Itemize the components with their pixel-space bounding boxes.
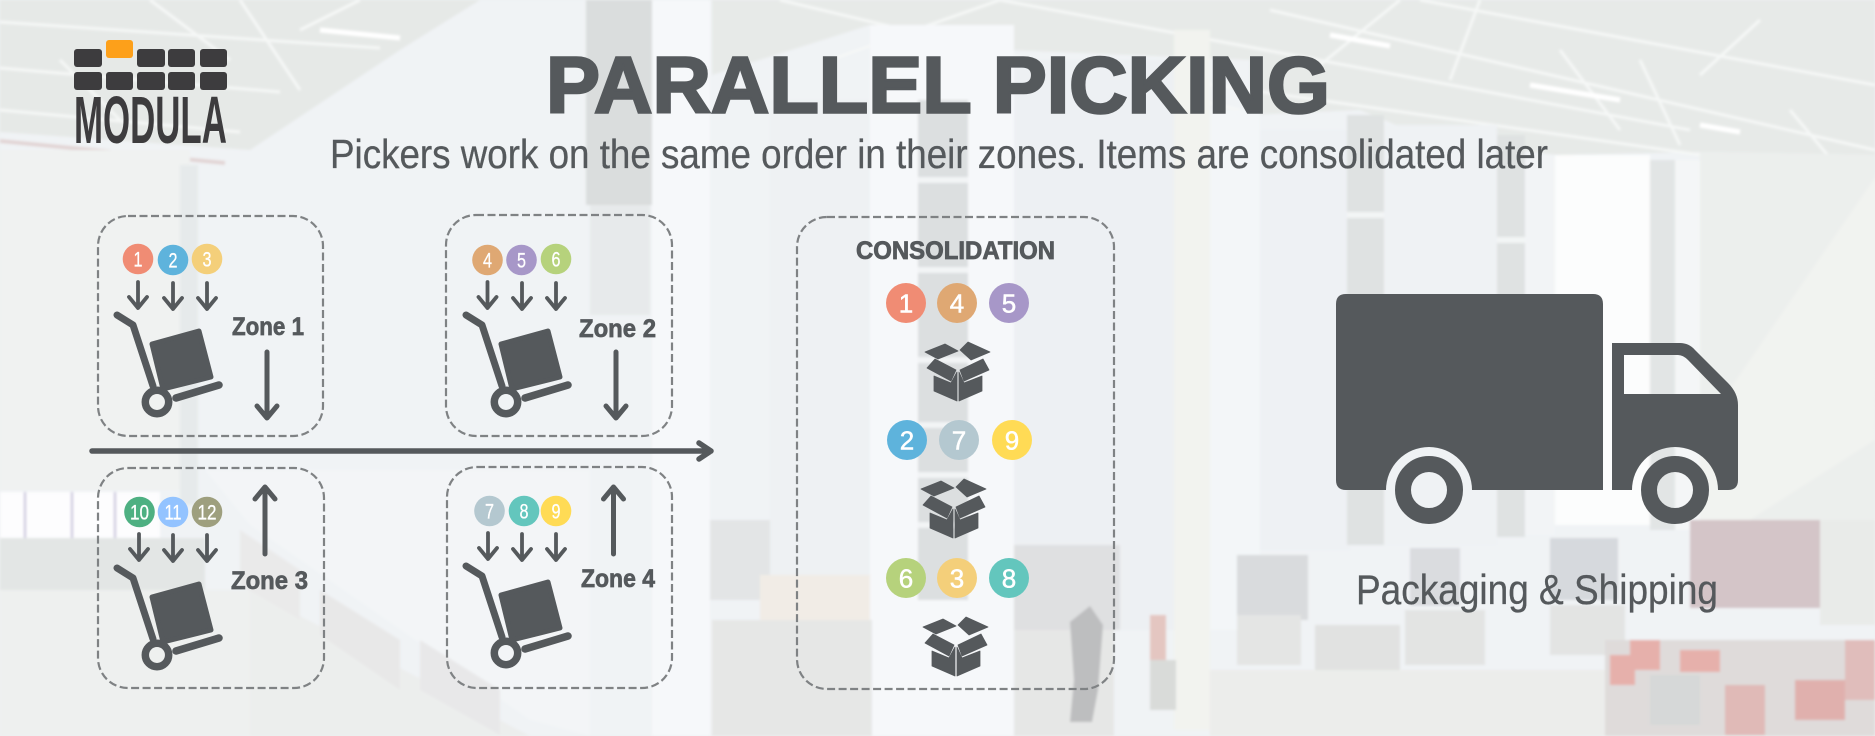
consolidation heading: CONSOLIDATION <box>856 237 1055 265</box>
arrow: flow to consolidation <box>92 443 711 459</box>
zone label: Zone 4 <box>581 565 655 593</box>
icon: hand truck with box <box>117 315 219 414</box>
icon: hand truck with box <box>117 568 219 667</box>
order items 1 2 3: 2 <box>168 250 178 272</box>
far right wall <box>1702 154 1872 182</box>
arrows into cart <box>479 533 565 560</box>
items 6 3 8: 8 <box>1002 564 1016 594</box>
order items 7 8 9: 9 <box>552 500 560 524</box>
icon: open box <box>925 342 990 401</box>
items 2 7 9: 7 <box>952 426 966 456</box>
left wall and window <box>50 149 190 172</box>
zone label: Zone 1 <box>232 313 304 341</box>
items 6 3 8: 3 <box>950 564 964 594</box>
label: packaging and shipping: Packaging & Shipping <box>1356 566 1718 613</box>
items 2 7 9 <box>887 420 1032 460</box>
order items 4 5 6: 5 <box>517 250 526 272</box>
panel: consolidation <box>797 217 1114 689</box>
order items 1 2 3: 3 <box>202 248 212 272</box>
items 6 3 8: 6 <box>899 564 913 594</box>
items 2 7 9: 9 <box>1005 426 1019 456</box>
icon: open box <box>921 479 986 538</box>
order items 4 5 6: 6 <box>552 248 560 272</box>
items 1 4 5: 4 <box>950 288 964 318</box>
title: PARALLEL PICKING <box>546 40 1330 130</box>
panel: zone 1 <box>98 216 323 436</box>
floor <box>1210 670 1610 736</box>
arrow: zone direction <box>257 352 277 418</box>
order items 4 5 6 <box>472 244 571 275</box>
arrows into cart <box>478 282 565 309</box>
items 6 3 8 <box>886 558 1029 598</box>
arrows into cart <box>130 534 216 561</box>
middle machines <box>205 470 590 736</box>
logo wordmark: MODULA <box>74 84 227 158</box>
order items 4 5 6: 4 <box>483 250 492 272</box>
icon: hand truck with box <box>466 315 568 414</box>
panel: zone 3 <box>98 468 324 688</box>
icon: hand truck with box <box>466 566 568 665</box>
arrow: zone direction <box>255 487 275 554</box>
order items 7 8 9: 8 <box>520 500 528 524</box>
order items 10 11 12: 12 <box>198 502 216 524</box>
order items 10 11 12 <box>124 497 222 527</box>
order items 10 11 12: 11 <box>164 502 182 524</box>
columns <box>586 0 652 205</box>
arrow: zone direction <box>604 487 624 554</box>
order items 1 2 3 <box>123 244 222 275</box>
logo blocks <box>74 40 227 90</box>
order items 1 2 3: 1 <box>134 248 142 272</box>
icon: open box <box>923 617 988 676</box>
logo: Modula <box>74 40 227 158</box>
order items 7 8 9 <box>474 496 571 526</box>
items 1 4 5 <box>886 283 1029 323</box>
items 1 4 5: 1 <box>899 288 913 318</box>
panel: zone 2 <box>446 215 672 436</box>
items 2 7 9: 2 <box>900 426 914 456</box>
order items 10 11 12: 10 <box>130 502 149 524</box>
icon: delivery truck <box>1336 294 1738 516</box>
arrows into cart <box>129 282 216 309</box>
machine bays <box>1237 555 1308 620</box>
arrow: zone direction <box>606 352 626 418</box>
zone label: Zone 3 <box>231 567 308 595</box>
items 1 4 5: 5 <box>1002 288 1016 318</box>
zone label: Zone 2 <box>579 315 656 343</box>
order items 7 8 9: 7 <box>485 500 494 524</box>
panel: zone 4 <box>447 467 672 688</box>
subtitle: Pickers work on the same order in their zones. Items are consolidated later <box>330 131 1548 177</box>
